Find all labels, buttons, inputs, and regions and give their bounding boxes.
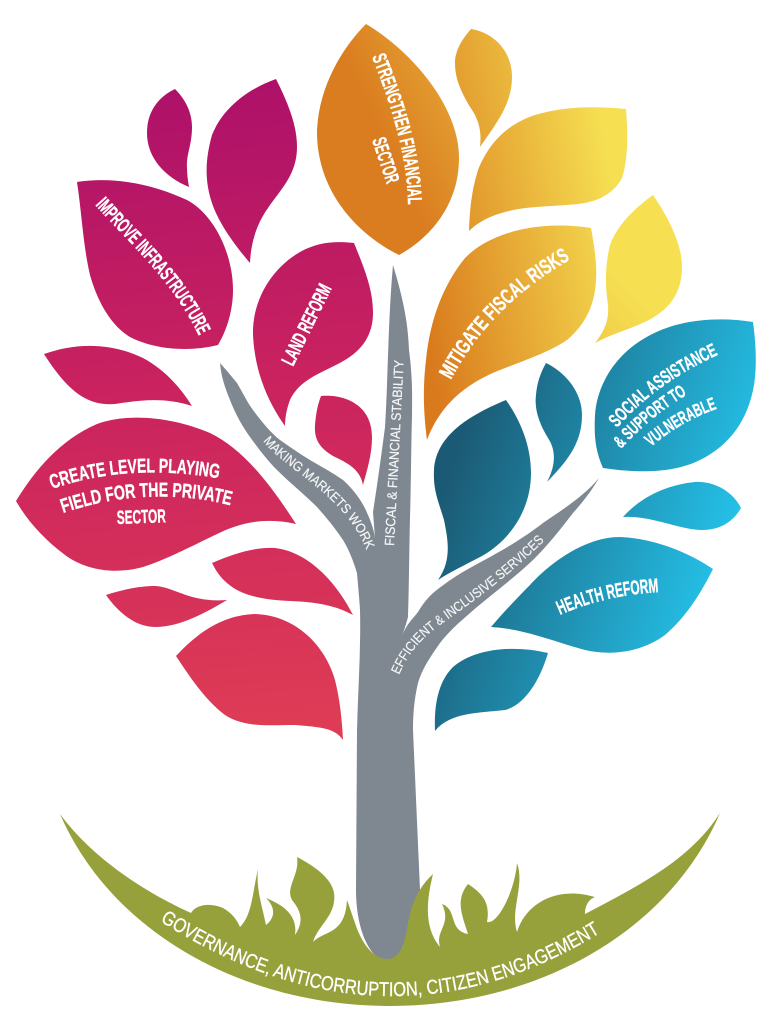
leaf: strengthen financial sector: SECTOR [367, 135, 403, 186]
leaf: land reform [253, 242, 373, 426]
leaf: large crimson bottom [176, 614, 343, 740]
branch label: making markets work: MAKING MARKETS WORK [264, 436, 375, 550]
branch label: efficient and inclusive services: EFFICIENT & INCLUSIVE SERVICES [390, 535, 544, 674]
leaf: create level playing field: SECTOR [116, 506, 166, 529]
branch label: fiscal and financial stability: FISCAL & FINANCIAL STABILITY [382, 360, 407, 546]
leaf: yellow right [595, 195, 682, 343]
leaf: strengthen financial sector: STRENGTHEN FINANCIAL [372, 53, 422, 204]
leaf: small teal bottom [435, 649, 548, 731]
leaf: social assistance: & SUPPORT TO [614, 386, 686, 448]
leaf: small crimson left [44, 346, 192, 406]
ground label: GOVERNANCE, ANTICORRUPTION, CITIZEN ENGAGEMENT [162, 912, 597, 998]
leaf: small crimson lower left [106, 586, 227, 627]
leaf: small magenta top [147, 89, 192, 187]
leaf: social assistance [594, 319, 756, 472]
leaf: small dark teal [536, 363, 582, 482]
leaf: large magenta top [207, 79, 297, 263]
leaf: small gold drop [455, 29, 512, 147]
leaf: social assistance: VULNERABLE [642, 397, 717, 446]
leaf: crimson lower right [212, 548, 353, 615]
leaf: create level playing field: CREATE LEVEL PLAYING [50, 458, 220, 488]
leaf: create level playing field: FIELD FOR THE PRIVATE [60, 482, 233, 513]
leaf: social assistance: SOCIAL ASSISTANCE [608, 343, 718, 426]
leaf: mitigate fiscal risks: MITIGATE FISCAL RISKS [438, 248, 569, 380]
tree trunk and branches [220, 265, 599, 959]
ground with grass [60, 813, 720, 1006]
leaf: small crimson centre [315, 396, 372, 485]
leaf: land reform: LAND REFORM [278, 281, 336, 369]
leaf: large yellow [469, 107, 627, 231]
leaf: mitigate fiscal risks [424, 226, 596, 440]
leaf: small cyan [623, 482, 741, 530]
leaf: health reform [491, 537, 713, 653]
leaf: strengthen financial sector [317, 24, 459, 255]
leaf: create level playing field [16, 418, 296, 571]
leaf: large dark teal [434, 400, 531, 580]
leaf: improve infrastructure: IMPROVE INFRASTRUCTURE [95, 196, 212, 336]
leaf: health reform: HEALTH REFORM [555, 578, 658, 615]
